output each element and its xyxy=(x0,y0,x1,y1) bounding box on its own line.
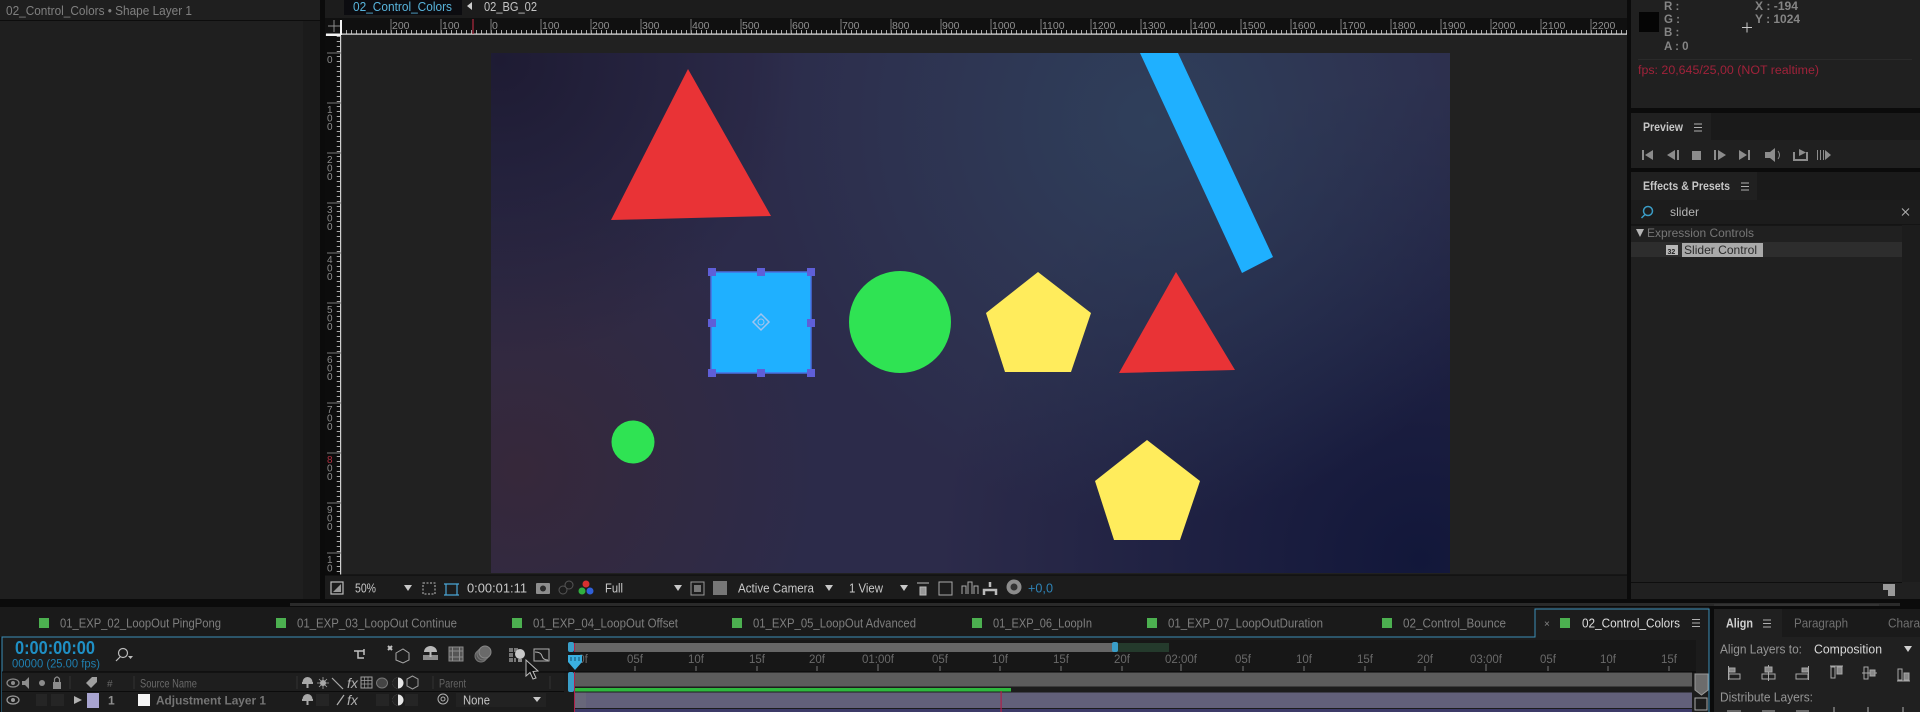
viewer tabs xyxy=(325,0,1627,18)
align tabs: Paragraph xyxy=(1794,616,1848,630)
layer column headers xyxy=(2,672,564,692)
distribute layers label: Distribute Layers: xyxy=(1720,690,1813,704)
timeline ruler: 05f xyxy=(1540,654,1557,666)
timeline ruler: 05f xyxy=(627,654,644,666)
timeline switches xyxy=(354,646,549,663)
viewer tabs: 02_Control_Colors xyxy=(353,0,452,14)
viewer toolbar: Active Camera xyxy=(738,582,814,596)
playback controls xyxy=(1642,148,1831,162)
playhead xyxy=(568,643,582,712)
position readout: X : -194 xyxy=(1755,1,1799,13)
tab: LoopOutDuration: 01_EXP_07_LoopOutDuration xyxy=(1168,616,1323,630)
horizontal ruler: 100 xyxy=(542,20,560,32)
colour readout: G : xyxy=(1664,14,1680,26)
vertical ruler: 0 xyxy=(327,164,333,174)
vertical ruler: 0 xyxy=(327,564,333,574)
slider control result: 32 xyxy=(1668,249,1675,256)
horizontal ruler: 400 xyxy=(692,20,710,32)
panel: info xyxy=(1631,0,1920,108)
colour readout xyxy=(1639,1,1688,53)
horizontal ruler: 1900 xyxy=(1442,20,1466,32)
vertical ruler: 9 xyxy=(327,505,333,516)
align tabs xyxy=(1726,616,1920,630)
horizontal ruler: 900 xyxy=(942,20,960,32)
search field: slider xyxy=(1670,205,1699,219)
panel: left project panel xyxy=(0,0,320,599)
tab: Offset: 01_EXP_04_LoopOut Offset xyxy=(533,616,678,630)
horizontal ruler: 600 xyxy=(792,20,810,32)
timeline ruler: 01:00f xyxy=(862,654,895,666)
vertical ruler: 0 xyxy=(327,272,333,283)
timeline ruler: 05f xyxy=(1235,654,1252,666)
panel: effects and presets xyxy=(1631,172,1920,599)
panel: preview xyxy=(1631,113,1920,168)
align tabs: Align xyxy=(1726,616,1753,630)
vertical ruler: 1 xyxy=(327,105,333,116)
effects heading: Effects & Presets xyxy=(1643,179,1730,193)
vertical ruler: 8 xyxy=(327,455,333,466)
tab: Continue: 01_EXP_03_LoopOut Continue xyxy=(297,616,457,630)
shape: large red triangle xyxy=(611,69,771,220)
horizontal ruler: 100 xyxy=(442,20,460,32)
mouse cursor xyxy=(526,660,538,679)
timeline ruler: 10f xyxy=(992,654,1009,666)
vertical ruler: 5 xyxy=(327,305,333,316)
vertical ruler: 7 xyxy=(327,405,333,416)
vertical ruler: 0 xyxy=(327,514,333,524)
horizontal ruler: 0 xyxy=(492,20,498,32)
vertical ruler: 0 xyxy=(327,114,333,124)
horizontal ruler: 2200 xyxy=(1592,20,1616,32)
horizontal ruler: 2000 xyxy=(1492,20,1516,32)
panel: align xyxy=(1714,604,1920,712)
preview heading: Preview xyxy=(1643,120,1684,134)
align layers dropdown: Align Layers to: xyxy=(1720,642,1802,656)
panel: timeline xyxy=(2,609,1709,712)
horizontal ruler: 500 xyxy=(742,20,760,32)
horizontal ruler: 1800 xyxy=(1392,20,1416,32)
panel title: 02_Control_Colors • Shape Layer 1 xyxy=(6,4,192,18)
vertical ruler: 0 xyxy=(327,322,333,333)
timeline ruler: 0f xyxy=(578,654,589,666)
vertical ruler: 0 xyxy=(327,464,333,474)
shape: small red triangle xyxy=(1119,272,1235,373)
horizontal ruler xyxy=(325,18,1627,35)
active tab xyxy=(2,609,1709,712)
horizontal ruler: 1200 xyxy=(1092,20,1116,32)
horizontal ruler: 1600 xyxy=(1292,20,1316,32)
vertical ruler: 0 xyxy=(327,214,333,224)
horizontal ruler: 2100 xyxy=(1542,20,1566,32)
shape: selected blue square xyxy=(708,268,815,377)
vertical ruler: 3 xyxy=(327,205,333,216)
vertical ruler: 0 xyxy=(327,472,333,483)
slider control result: Slider Control xyxy=(1684,243,1757,257)
vertical ruler: 0 xyxy=(327,422,333,433)
timeline search xyxy=(116,648,133,661)
vertical ruler: 0 xyxy=(327,414,333,424)
timeline ruler: 20f xyxy=(1417,654,1434,666)
composition tab bar xyxy=(0,607,1709,637)
viewer toolbar: Full xyxy=(605,582,623,596)
timeline ruler: 20f xyxy=(809,654,826,666)
vertical ruler: 6 xyxy=(327,355,333,366)
search field xyxy=(1642,205,1909,219)
panel: composition viewer xyxy=(325,0,1627,599)
colour readout: R : xyxy=(1664,1,1679,13)
timeline tracks xyxy=(568,643,1708,712)
timeline ruler: 10f xyxy=(688,654,705,666)
viewer toolbar: 50% xyxy=(355,582,376,596)
tab: Bounce: 02_Control_Bounce xyxy=(1403,616,1506,630)
colour readout: A : 0 xyxy=(1664,41,1688,53)
shape: blue diagonal bar xyxy=(1140,53,1273,273)
horizontal ruler: 1100 xyxy=(1042,20,1065,32)
horizontal ruler: 1700 xyxy=(1342,20,1366,32)
layer row: Adjustment Layer 1: 1 xyxy=(108,694,115,708)
shape: large green circle xyxy=(849,271,951,373)
tab: LoopIn: 01_EXP_06_LoopIn xyxy=(993,616,1092,630)
timeline ruler: 10f xyxy=(1600,654,1617,666)
vertical ruler: 0 xyxy=(327,314,333,324)
vertical ruler xyxy=(325,20,342,575)
timeline ruler: 15f xyxy=(1053,654,1070,666)
position readout: Y : 1024 xyxy=(1755,14,1801,26)
layer row: Adjustment Layer 1 xyxy=(2,692,564,712)
current time xyxy=(12,638,100,670)
vertical ruler: 0 xyxy=(327,364,333,374)
parent heading: Parent xyxy=(439,676,467,690)
horizontal ruler: 200 xyxy=(392,20,410,32)
shape: lower yellow pentagon xyxy=(1095,440,1200,540)
source name heading: Source Name xyxy=(140,676,197,690)
viewer toolbar xyxy=(325,574,1627,599)
vertical ruler: 0 xyxy=(327,522,333,533)
viewer tabs: 02_BG_02 xyxy=(484,0,537,14)
timeline ruler: 15f xyxy=(1661,654,1678,666)
horizontal ruler: 1400 xyxy=(1192,20,1216,32)
vertical ruler: 0 xyxy=(327,372,333,383)
current time: 00000 (25.00 fps) xyxy=(12,656,100,670)
horizontal ruler: 1300 xyxy=(1142,20,1166,32)
timeline ruler: 05f xyxy=(932,654,949,666)
active tab: × xyxy=(1544,619,1550,630)
panel corner icon xyxy=(1883,584,1895,596)
layer row: Adjustment Layer 1: fx xyxy=(347,692,359,708)
timeline ruler xyxy=(2,640,1696,672)
composition canvas xyxy=(491,53,1450,573)
fps warning: fps: 20,645/25,00 (NOT realtime) xyxy=(1638,65,1819,77)
shape: yellow pentagon xyxy=(986,272,1091,372)
horizontal ruler: 700 xyxy=(842,20,860,32)
timeline ruler: 03:00f xyxy=(1470,654,1503,666)
horizontal ruler: 800 xyxy=(892,20,910,32)
active tab: 02_Control_Colors xyxy=(1582,616,1680,630)
timeline ruler: 10f xyxy=(1296,654,1313,666)
vertical ruler: 4 xyxy=(327,255,333,266)
shape: small green circle xyxy=(612,420,654,464)
vertical ruler: 0 xyxy=(327,55,333,66)
viewer toolbar: 0:00:01:11 xyxy=(467,582,527,596)
horizontal ruler: 300 xyxy=(642,20,660,32)
vertical ruler: 0 xyxy=(327,222,333,233)
horizontal ruler: 200 xyxy=(592,20,610,32)
horizontal ruler: 1000 xyxy=(992,20,1016,32)
viewer toolbar: +0,0 xyxy=(1028,582,1053,596)
vertical ruler: 1 xyxy=(327,555,333,566)
timeline ruler: 02:00f xyxy=(1165,654,1198,666)
colour readout: B : xyxy=(1664,27,1679,39)
vertical ruler: 0 xyxy=(327,264,333,274)
layer row: Adjustment Layer 1: Adjustment Layer 1 xyxy=(156,694,266,708)
timeline ruler: 15f xyxy=(749,654,766,666)
viewer toolbar: 1 View xyxy=(849,582,884,596)
horizontal ruler: 1500 xyxy=(1242,20,1266,32)
tab: Advanced: 01_EXP_05_LoopOut Advanced xyxy=(753,616,916,630)
current time: 0:00:00:00 xyxy=(15,638,95,658)
expression controls group: Expression Controls xyxy=(1647,226,1754,240)
distribute icons xyxy=(1727,707,1903,712)
vertical ruler: 2 xyxy=(327,155,333,166)
timeline ruler: 15f xyxy=(1357,654,1374,666)
position readout xyxy=(1742,1,1801,32)
align layers dropdown: Composition xyxy=(1814,642,1882,656)
align layers dropdown xyxy=(1720,642,1912,656)
align icons xyxy=(1728,665,1910,681)
vertical ruler: 0 xyxy=(327,172,333,183)
slider control result xyxy=(1631,242,1902,257)
timeline ruler: 20f xyxy=(1114,654,1131,666)
layer column headers: # xyxy=(107,679,113,690)
layer row: Adjustment Layer 1: None xyxy=(463,694,490,708)
tab: PingPong: 01_EXP_02_LoopOut PingPong xyxy=(60,616,221,630)
vertical ruler: 0 xyxy=(327,122,333,133)
layer column headers: fx xyxy=(347,675,359,691)
